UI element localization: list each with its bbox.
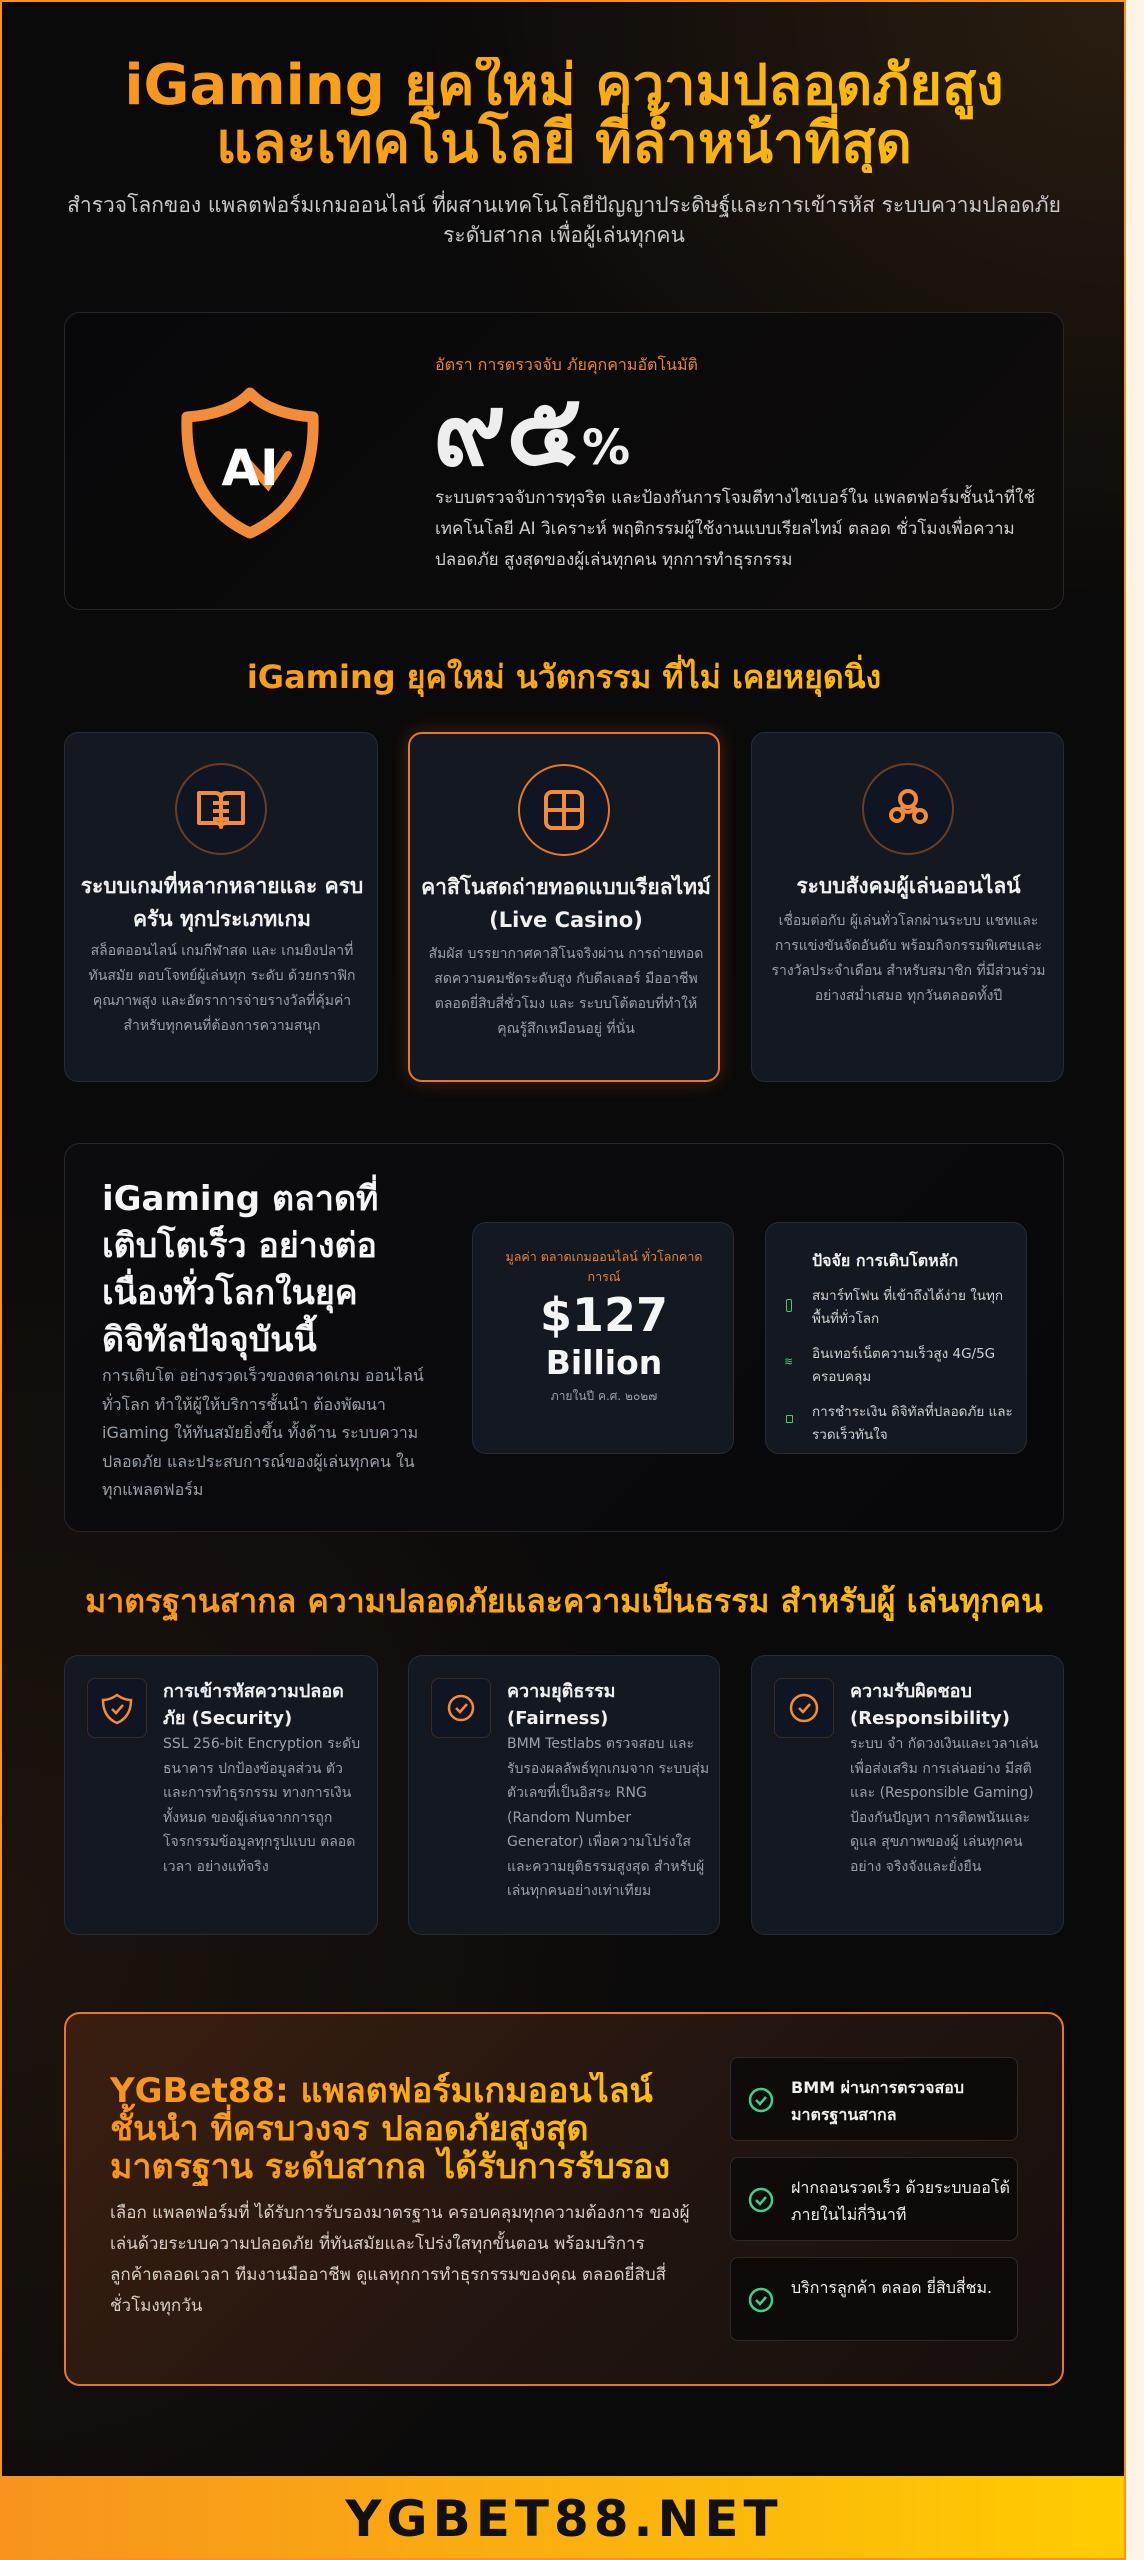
stat box: market size <box>472 1222 734 1454</box>
market text: การเติบโต อย่างรวดเร็วของตลาดเกม ออนไลน์ทั่วโลก ทำให้ผู้ให้บริการชั้นนำ ต้องพัฒนา iGaming ให้ทันสมัยยิ่งขึ้น ทั้งด้าน ระบบความปลอดภัย และประสบการณ์ของผู้เล่นทุกคน ในทุกแพลตฟอร์ม <box>102 1366 424 1499</box>
box note: ภายในปี ค.ศ. ๒๐๒๗ <box>551 1389 657 1403</box>
stat label: อัตรา การตรวจจับ ภัยคุกคามอัตโนมัติ <box>435 355 698 374</box>
card: security <box>64 1655 378 1935</box>
market title: iGaming ตลาดที่ เติบโตเร็ว อย่างต่อเนื่องทั่วโลกในยุค ดิจิทัลปัจจุบันนี้ <box>102 1179 378 1360</box>
stat description: ระบบตรวจจับการทุจริต และป้องกันการโจมตีทางไซเบอร์ใน แพลตฟอร์มชั้นนำที่ใช้เทคโนโลยี AI วิเคราะห์ พฤติกรรมผู้ใช้งานแบบเรียลไทม์ ตลอด ชั่วโมงเพื่อความปลอดภัย สูงสุดของผู้เล่นทุกคน ทุกการทำธุรกรรม <box>435 488 1035 570</box>
card: e-learning <box>64 732 378 1082</box>
checklist item 3: บริการลูกค้า ตลอด ยี่สิบสี่ชม. <box>791 2278 992 2297</box>
card text: สัมผัส บรรยากาศคาสิโนจริงผ่าน การถ่ายทอดสดความคมชัดระดับสูง กับดีลเลอร์ มืออาชีพตลอดยี่สิบสี่ชั่วโมง และ ระบบโต้ตอบที่ทำให้คุณรู้สึกเหมือนอยู่ ที่นั่น <box>429 946 703 1037</box>
subtitle: สำรวจโลกของ แพลตฟอร์มเกมออนไลน์ ที่ผสานเทคโนโลยีปัญญาประดิษฐ์และการเข้ารหัส ระบบความปลอดภัยระดับสากล เพื่อผู้เล่นทุกคน <box>67 193 1061 247</box>
heading: trust pillars <box>42 1576 1086 1627</box>
heading: trust pillars: มาตรฐานสากล ความปลอดภัยและความเป็นธรรม สำหรับผู้ เล่นทุกคน <box>85 1582 1043 1620</box>
checklist item 3 <box>730 2257 1018 2341</box>
icon: shield check <box>87 1678 147 1738</box>
card title: (Live Casino) <box>489 908 643 932</box>
big value: $127 <box>540 1288 668 1342</box>
icon: check circle <box>431 1678 491 1738</box>
card title: ความรับผิดชอบ (Responsibility) <box>850 1681 1010 1729</box>
card: responsibility <box>751 1655 1064 1935</box>
checklist item 1: BMM ผ่านการตรวจสอบ มาตรฐานสากล <box>791 2078 964 2124</box>
footer banner: YGBET88.NET <box>345 2490 783 2548</box>
card title: ระบบสังคมผู้เล่นออนไลน์ <box>796 874 1021 898</box>
card text: SSL 256-bit Encryption ระดับธนาคาร ปกป้องข้อมูลส่วน ตัวและการทำธุรกรรม ทางการเงินทั้งหมด ของผู้เล่นจากการถูก โจรกรรมข้อมูลทุกรูปแบบ ตลอดเวลา อย่างแท้จริง <box>163 1736 360 1874</box>
icon: check <box>774 1678 834 1738</box>
icon: grid <box>518 764 610 856</box>
card text: เชื่อมต่อกับ ผู้เล่นทั่วโลกผ่านระบบ แชทและการแข่งขันจัดอันดับ พร้อมกิจกรรมพิเศษและรางวัลประจำเดือน สำหรับสมาชิก ที่มีส่วนร่วมอย่างสม่ำเสมอ ทุกวันตลอดทั้งปี <box>771 913 1046 1004</box>
panel: YGBet88 CTA <box>64 2012 1064 2386</box>
list title: ปัจจัย การเติบโตหลัก <box>812 1251 958 1270</box>
card title: ความยุติธรรม (Fairness) <box>507 1681 616 1729</box>
list item: mobile: สมาร์ทโฟน ที่เข้าถึงได้ง่าย ในทุกพื้นที่ทั่วโลก <box>812 1288 1003 1327</box>
heading: iGaming trends: iGaming ยุคใหม่ นวัตกรรม ที่ไม่ เคยหยุดนิ่ง <box>247 658 881 696</box>
icon: AI shield: AI <box>221 439 279 497</box>
icon: book <box>175 763 267 855</box>
box: drivers list <box>765 1222 1027 1454</box>
list item: network: ≋ <box>784 1355 793 1368</box>
list item: payment: การชำระเงิน ดิจิทัลที่ปลอดภัย และรวดเร็วทันใจ <box>812 1404 1013 1443</box>
icon: people <box>862 763 954 855</box>
heading: iGaming trends <box>42 652 1086 703</box>
card: fairness <box>408 1655 720 1935</box>
card title: คาสิโนสดถ่ายทอดแบบเรียลไทม์ <box>421 875 711 899</box>
card title <box>421 874 711 932</box>
title <box>42 57 1086 173</box>
checklist item 1 <box>730 2057 1018 2141</box>
value unit: Billion <box>546 1343 662 1382</box>
panel: AI stat <box>64 312 1064 610</box>
title: และเทคโนโลยี ที่ล้ำหน้าที่สุด <box>216 111 912 176</box>
panel: market <box>64 1143 1064 1532</box>
checklist item 2 <box>730 2157 1018 2241</box>
CTA title: YGBet88: แพลตฟอร์มเกมออนไลน์ชั้นนำ ที่ครบวงจร ปลอดภัยสูงสุด มาตรฐาน ระดับสากล ได้รับการรับรอง <box>110 2071 670 2187</box>
card: live casino <box>408 732 720 1082</box>
CTA text: เลือก แพลตฟอร์มที่ ได้รับการรับรองมาตรฐาน ครอบคลุมทุกความต้องการ ของผู้ เล่นด้วยระบบความปลอดภัย ที่ทันสมัยและโปร่งใสทุกขั้นตอน พร้อมบริการ ลูกค้าตลอดเวลา ทีมงานมืออาชีพ ดูแลทุกการทำธุรกรรมของคุณ ตลอดยี่สิบสี่ ชั่วโมงทุกวัน <box>110 2203 690 2316</box>
card text: BMM Testlabs ตรวจสอบ และ รับรองผลลัพธ์ทุกเกมจาก ระบบสุ่มตัวเลขที่เป็นอิสระ RNG (Random Number Generator) เพื่อความโปร่งใส และความยุติธรรมสูงสุด สำหรับผู้เล่นทุกคนอย่างเท่าเทียม <box>507 1736 709 1899</box>
checklist item 2: ฝากถอนรวดเร็ว ด้วยระบบออโต้ ภายในไม่กี่วินาที <box>791 2178 1010 2224</box>
card title: ระบบเกมที่หลากหลายและ ครบครัน ทุกประเภทเกม <box>81 874 363 931</box>
list item: network: อินเทอร์เน็ตความเร็วสูง 4G/5G ครอบคลุม <box>812 1346 995 1385</box>
card: community <box>751 732 1064 1082</box>
card text: ระบบ จำ กัดวงเงินและเวลาเล่น เพื่อส่งเสริม การเล่นอย่าง มีสติและ (Responsible Gaming) ป้องกันปัญหา การติดพนันและดูแล สุขภาพของผู้ เล่นทุกคนอย่าง จริงจังและยั่งยืน <box>850 1736 1038 1874</box>
icon: AI shield <box>181 388 319 538</box>
title: iGaming ยุคใหม่ ความปลอดภัยสูง <box>124 53 1004 118</box>
big number: ๙๕% <box>433 371 630 488</box>
box label: มูลค่า ตลาดเกมออนไลน์ ทั่วโลกคาดการณ์ <box>506 1249 702 1284</box>
footer banner <box>2 2476 1126 2560</box>
card text: สล็อตออนไลน์ เกมกีฬาสด และ เกมยิงปลาที่ทันสมัย ตอบโจทย์ผู้เล่นทุก ระดับ ด้วยกราฟิก คุณภาพสูง และอัตราการจ่ายรางวัลที่คุ้มค่า สำหรับทุกคนที่ต้องการความสนุก <box>89 943 355 1034</box>
card title: การเข้ารหัสความปลอด ภัย (Security) <box>163 1681 344 1729</box>
